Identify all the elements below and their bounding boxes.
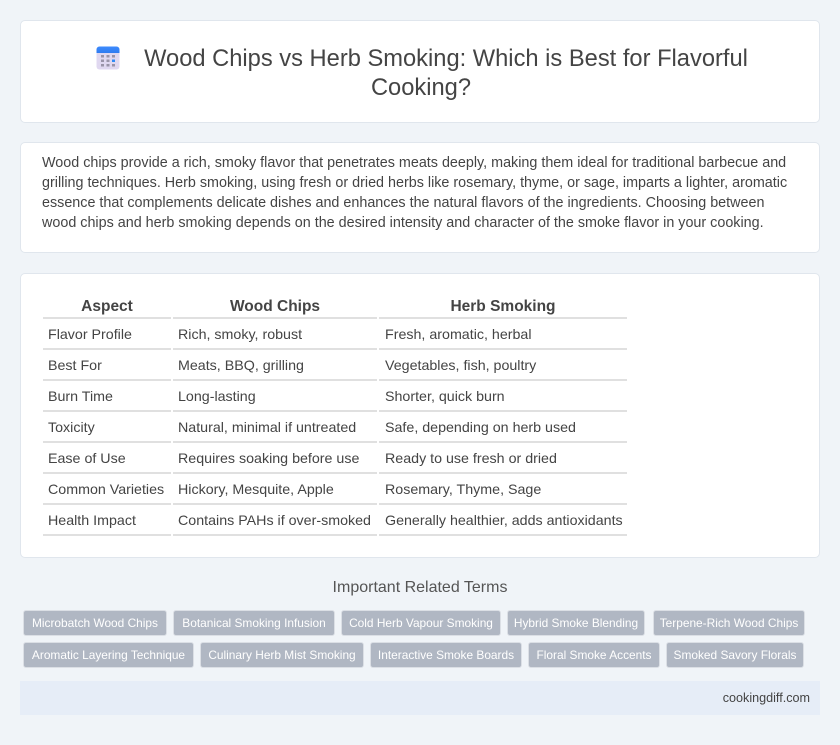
row: best for: Best For <box>48 358 102 374</box>
row: flavor profile <box>48 327 532 343</box>
tag: Microbatch Wood Chips <box>32 616 158 630</box>
tag <box>370 642 522 668</box>
comparison table panel <box>20 273 820 558</box>
title: Wood Chips vs Herb Smoking: Which is Best for Flavorful <box>144 46 748 72</box>
row: ease of use <box>48 451 557 467</box>
row: health impact <box>48 513 623 529</box>
header: herb smoking: Herb Smoking <box>450 298 556 315</box>
row: best for: Vegetables, fish, poultry <box>385 358 536 374</box>
tag <box>23 610 167 636</box>
tag <box>341 610 501 636</box>
footer bar <box>20 681 820 715</box>
related terms tags <box>23 610 805 668</box>
tag: Cold Herb Vapour Smoking <box>349 616 493 630</box>
row: flavor profile: Fresh, aromatic, herbal <box>385 327 532 343</box>
row: flavor profile: Flavor Profile <box>48 327 132 343</box>
row: ease of use: Ready to use fresh or dried <box>385 451 557 467</box>
header: aspect: Aspect <box>81 298 133 315</box>
tag <box>653 610 805 636</box>
row: health impact: Health Impact <box>48 513 136 529</box>
tag <box>173 610 335 636</box>
related terms heading: Important Related Terms <box>333 579 507 596</box>
tag <box>507 610 645 636</box>
intro paragraph: essence that complements delicate dishes and enhances the natural flavors of the ingredients. Choosing between <box>42 195 764 211</box>
row: ease of use: Ease of Use <box>48 451 126 467</box>
tag: Interactive Smoke Boards <box>378 648 514 662</box>
row: common varieties: Common Varieties <box>48 482 164 498</box>
comparison table <box>43 298 627 536</box>
row: health impact: Contains PAHs if over-smoked <box>178 513 371 529</box>
tag <box>528 642 660 668</box>
intro paragraph: Wood chips provide a rich, smoky flavor that penetrates meats deeply, making them ideal for traditional barbecue and <box>42 155 786 171</box>
tag: Aromatic Layering Technique <box>32 648 185 662</box>
title <box>144 46 748 101</box>
header panel <box>20 20 820 123</box>
row: toxicity <box>48 420 576 436</box>
tag <box>666 642 804 668</box>
row: burn time: Long-lasting <box>178 389 256 405</box>
intro paragraph: grilling techniques. Herb smoking, using fresh or dried herbs like rosemary, thyme, or sage, imparts a lighter, aromatic <box>42 175 787 191</box>
header: wood chips: Wood Chips <box>230 298 320 315</box>
row: best for: Meats, BBQ, grilling <box>178 358 304 374</box>
row: common varieties: Hickory, Mesquite, Apple <box>178 482 334 498</box>
title: Cooking? <box>371 75 471 101</box>
row: health impact: Generally healthier, adds antioxidants <box>385 513 623 529</box>
row: flavor profile: Rich, smoky, robust <box>178 327 302 343</box>
tag: Hybrid Smoke Blending <box>514 616 638 630</box>
row: common varieties: Rosemary, Thyme, Sage <box>385 482 541 498</box>
tag: Botanical Smoking Infusion <box>182 616 326 630</box>
row: ease of use: Requires soaking before use <box>178 451 359 467</box>
tag <box>200 642 364 668</box>
row: toxicity: Safe, depending on herb used <box>385 420 576 436</box>
tag: Terpene-Rich Wood Chips <box>660 616 798 630</box>
row: toxicity: Toxicity <box>48 420 95 436</box>
tag: Smoked Savory Florals <box>674 648 796 662</box>
row: toxicity: Natural, minimal if untreated <box>178 420 356 436</box>
intro paragraph <box>42 155 787 231</box>
row: burn time: Burn Time <box>48 389 113 405</box>
row: burn time <box>48 389 505 405</box>
row: best for <box>48 358 536 374</box>
row: common varieties <box>48 482 541 498</box>
intro paragraph: wood chips and herb smoking depends on the desired intensity and character of the smoke flavor in your cooking. <box>42 215 764 231</box>
tag: Culinary Herb Mist Smoking <box>208 648 356 662</box>
row: burn time: Shorter, quick burn <box>385 389 505 405</box>
intro text panel <box>20 142 820 253</box>
tag: Floral Smoke Accents <box>536 648 652 662</box>
icon: calendar grid <box>96 46 120 70</box>
tag <box>23 642 194 668</box>
footer site name: cookingdiff.com <box>723 691 810 705</box>
